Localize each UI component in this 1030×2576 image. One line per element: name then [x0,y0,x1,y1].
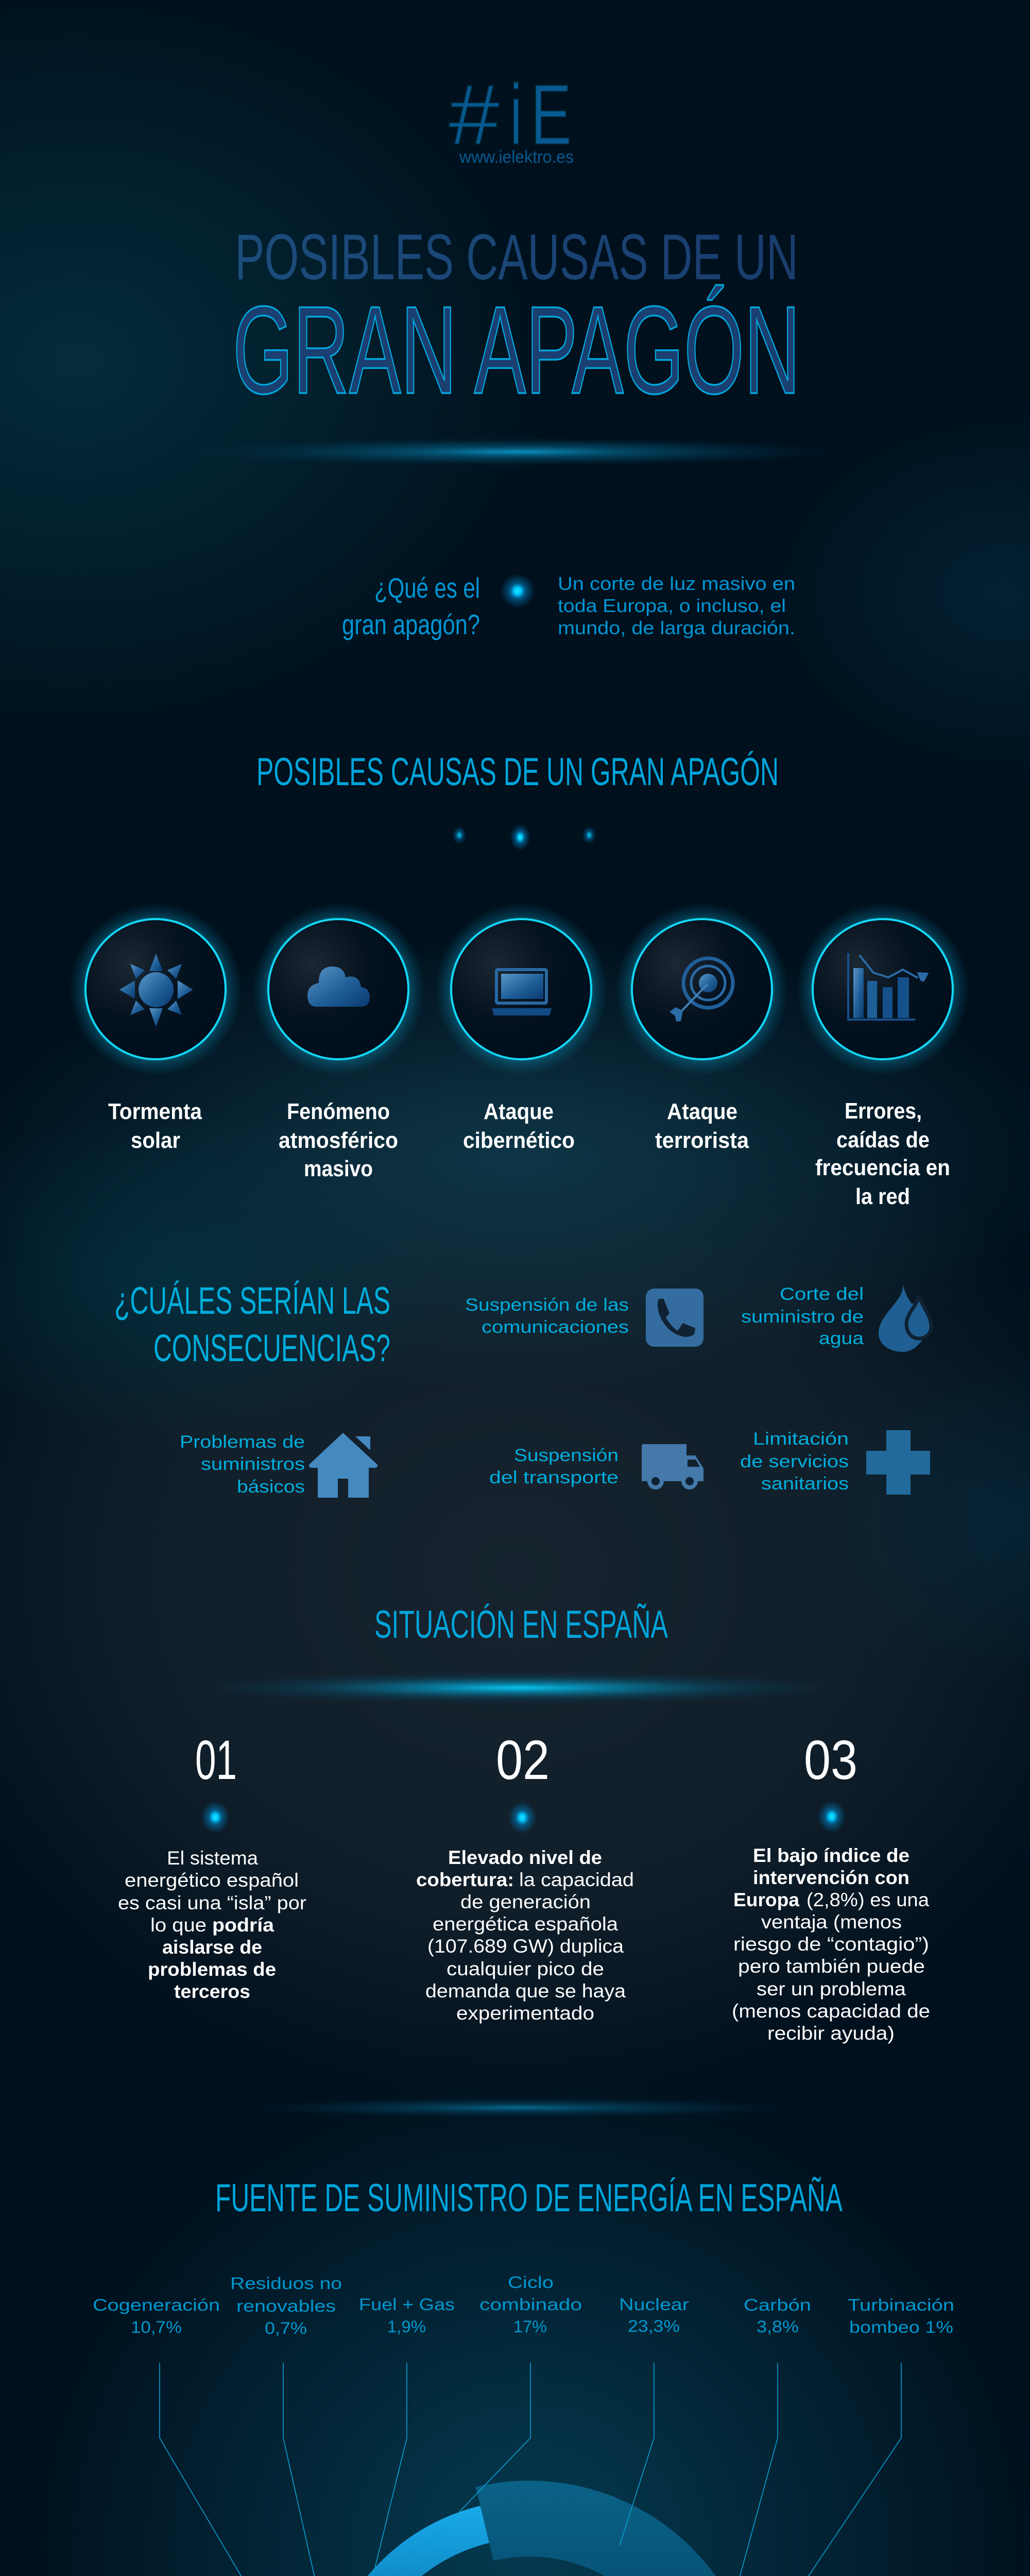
definition: que es el gran apagon: gran apagón? [342,608,480,640]
column 03: Europa [733,1889,799,1910]
cause: tormenta solar: solar [131,1128,180,1153]
consequence: servicios sanitarios: Limitación [753,1429,849,1449]
column 01: lo que [150,1914,207,1936]
label: fuel + gas [359,2295,455,2336]
cause: ataque terrorista: Ataque [667,1099,737,1124]
label: turbinacion bombeo: Turbinación [848,2296,954,2314]
icon: falling bar chart [848,953,929,1020]
label: turbinacion bombeo [848,2296,954,2336]
icon: target with arrow [670,958,733,1022]
consequence: agua [741,1284,931,1352]
column 03: El bajo índice de [753,1845,909,1866]
consequence: transporte: Suspensión [514,1446,619,1465]
logo: i [510,67,522,163]
consequence: agua: suministro de [741,1307,864,1327]
cause: fenomeno atmosferico: Fenómeno [287,1099,390,1124]
cause: errores, caidas de frecuencia [796,903,969,1209]
consequence: agua: agua [819,1329,864,1348]
column 02: experimentado [456,2003,594,2024]
definition: que es el gran apagon: Un corte de luz masivo en [558,573,795,594]
label: cogeneracion: Cogeneración [93,2296,220,2314]
column 03: ventaja (menos [761,1911,902,1933]
icon: house [309,1433,377,1498]
column 02: demanda que se haya [425,1980,626,2002]
label: cogeneracion [93,2296,220,2336]
column 01: es casi una “isla” por [118,1892,306,1913]
column 01: aislarse de [162,1937,262,1958]
title: POSIBLES CAUSAS DE UN [235,222,798,293]
cause: errores, caidas de frecuencia: caídas de [836,1127,930,1153]
label: residuos no renovables: 0,7% [265,2319,307,2337]
label: ciclo combinado [479,2273,582,2336]
panel: situation columns [118,1728,930,2044]
column 02: la capacidad [519,1869,634,1890]
consequence: servicios sanitarios: sanitarios [761,1474,849,1494]
cause: ataque terrorista [615,903,788,1153]
heading: posibles causas: POSIBLES CAUSAS DE UN GRAN APAGÓN [256,750,779,794]
column 02: cobertura: [416,1869,514,1890]
label: fuel + gas: 1,9% [387,2317,426,2336]
icon: laptop [492,970,552,1015]
consequence: transporte: del transporte [489,1468,619,1487]
leader lines: non renewable [160,2363,901,2576]
heading: consecuencias [114,1279,390,1369]
chart: energy supply ring [283,2481,802,2576]
label: nuclear: Nuclear [619,2295,689,2314]
label: turbinacion bombeo: bombeo 1% [849,2318,953,2336]
column 03: intervención con [753,1867,909,1888]
column 02: energética española [433,1913,618,1935]
column 03: (2,8%) es una [806,1889,929,1910]
column 02: Elevado nivel de [448,1847,602,1868]
label: carbon: Carbón [744,2296,811,2314]
column 02: 02 [496,1728,550,1791]
icon: sun [119,954,193,1027]
label: residuos no renovables: renovables [236,2297,336,2315]
three glowing dots [452,824,596,851]
label: ciclo combinado: 17% [513,2317,547,2336]
column 01: problemas de [148,1959,276,1980]
segment: ciclo combinado [327,2506,489,2576]
column 03 [732,1728,930,2044]
icon: cloud [307,967,370,1007]
heading: situacion en espana: SITUACIÓN EN ESPAÑA [374,1603,668,1647]
label: nuclear: 23,3% [628,2317,680,2335]
glowing dot [500,573,535,608]
cause: fenomeno atmosferico: masivo [304,1156,373,1181]
label: fuel + gas: Fuel + Gas [359,2295,455,2314]
cause: ataque terrorista: terrorista [655,1128,749,1153]
column 01: terceros [174,1981,250,2002]
column 02: de generación [460,1891,591,1912]
icon: phone [646,1289,703,1347]
heading: consecuencias: ¿CUÁLES SERÍAN LAS [114,1279,390,1322]
glow divider [179,1671,859,1704]
title glow divider [188,437,847,466]
column 02: (107.689 GW) duplica [427,1936,624,1957]
consequence: servicios sanitarios [740,1429,930,1495]
column 03: ser un problema [757,1978,906,1999]
panel: causes [69,903,969,1209]
panel: consequences [114,1279,931,1498]
label: residuos no renovables: Residuos no [230,2274,342,2293]
icon: medical cross [866,1430,930,1495]
consequence: suministros basicos: suministros [201,1454,305,1474]
icon: water drop [879,1284,931,1352]
logo [449,67,574,167]
definition: que es el gran apagon: toda Europa, o incluso, el [558,595,786,616]
heading: consecuencias: CONSECUENCIAS? [153,1327,390,1369]
column 02 [416,1728,634,2024]
column 01: 01 [195,1728,237,1791]
icon: truck [642,1444,703,1487]
consequence: servicios sanitarios: de servicios [740,1452,849,1471]
cause: ataque cibernetico [435,903,608,1153]
consequence: transporte [489,1444,703,1487]
label: ciclo combinado: Ciclo [508,2273,554,2292]
consequence: comunicaciones: comunicaciones [482,1317,629,1337]
column 03: 03 [804,1728,857,1791]
definition: que es el gran apagon: ¿Qué es el [374,572,480,604]
cause: ataque cibernetico: cibernético [463,1128,575,1153]
label: carbon [744,2296,811,2336]
label: cogeneracion: 10,7% [131,2318,182,2336]
definition: que es el gran apagon [342,572,795,640]
cause: tormenta solar [69,903,242,1153]
column 03: (menos capacidad de [732,2001,930,2022]
consequence: suministros basicos: Problemas de [180,1432,305,1452]
labels: non renewable sources [93,2273,954,2337]
segment: nuclear [476,2481,746,2576]
cause: errores, caidas de frecuencia: frecuencia en [815,1155,950,1180]
column 03: riesgo de “contagio”) [733,1934,929,1955]
consequence: suministros basicos [180,1432,377,1498]
cause: errores, caidas de frecuencia: la red [855,1184,910,1209]
cause: fenomeno atmosferico [252,903,425,1181]
cause: tormenta solar: Tormenta [108,1099,202,1124]
column 03: pero también puede [738,1956,925,1977]
label: ciclo combinado: combinado [479,2295,582,2314]
cause: errores, caidas de frecuencia: Errores, [845,1098,922,1124]
definition: que es el gran apagon: mundo, de larga duración. [558,617,795,638]
consequence: comunicaciones: Suspensión de las [465,1295,629,1315]
column 01 [118,1728,306,2002]
glow divider [230,2097,807,2118]
cause: ataque cibernetico: Ataque [484,1099,554,1124]
cause: fenomeno atmosferico: atmosférico [279,1128,398,1153]
title [233,222,800,420]
column 02: cualquier pico de [447,1958,604,1979]
consequence: comunicaciones [465,1289,703,1347]
logo: E [530,67,572,163]
label: carbon: 3,8% [757,2317,799,2336]
column 01: energético español [125,1870,299,1891]
column 01: podría [212,1914,274,1936]
label: residuos no renovables [230,2274,342,2337]
column 01: El sistema [167,1848,258,1869]
logo: # [449,67,500,163]
column 03: recibir ayuda) [767,2023,895,2044]
logo: www.ielektro.es [459,147,574,167]
label: nuclear [619,2295,689,2335]
consequence: suministros basicos: básicos [237,1477,305,1497]
consequence: agua: Corte del [780,1284,864,1304]
